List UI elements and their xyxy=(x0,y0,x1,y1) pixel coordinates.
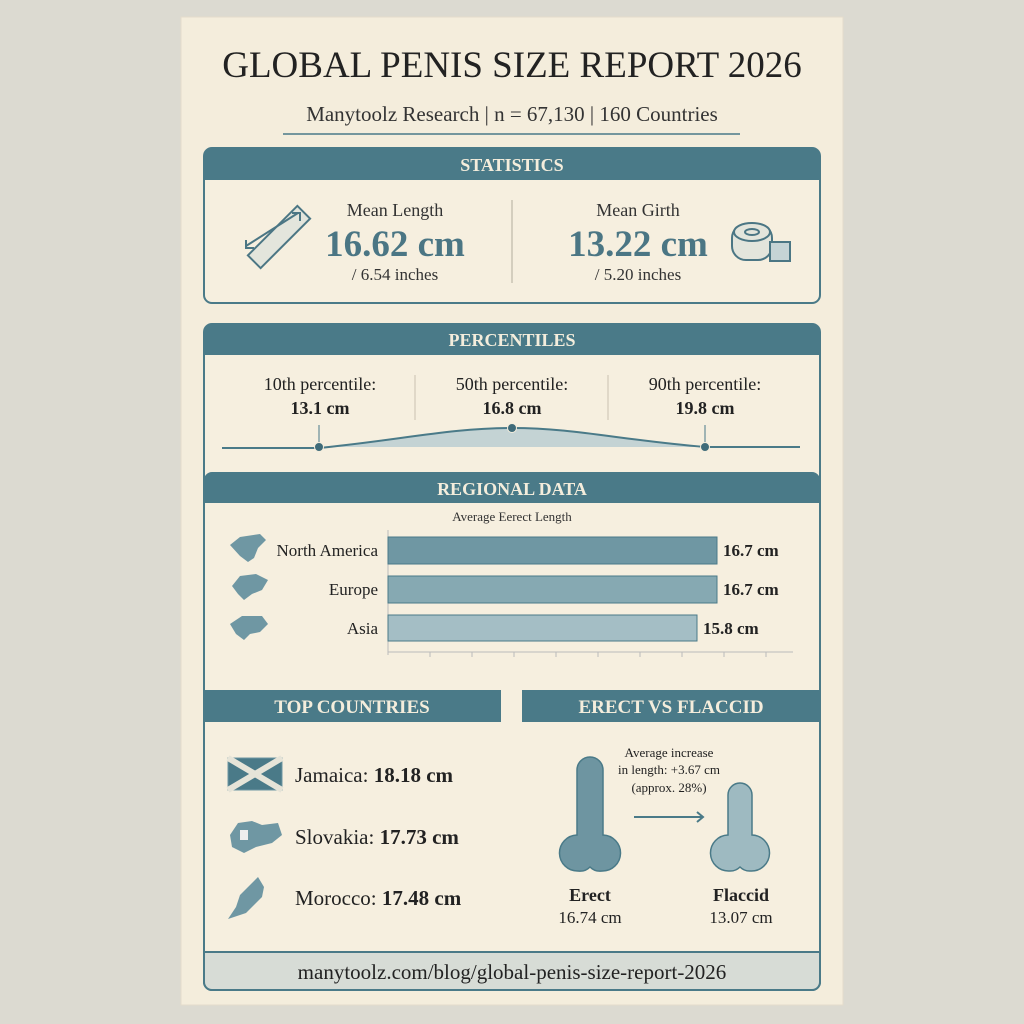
header: top countries xyxy=(204,690,501,722)
icon: tape measure xyxy=(732,223,790,261)
stat: mean girth: Mean Girth xyxy=(596,200,680,220)
labels: erect/flaccid: Flaccid xyxy=(713,885,769,905)
bar chart: regional: Europe xyxy=(329,580,378,599)
chart: distribution curve xyxy=(222,424,800,452)
list: top countries: Slovakia: 17.73 cm xyxy=(295,825,459,849)
list: top countries: Morocco: 17.48 cm xyxy=(295,886,462,910)
percentile labels: 10th percentile: xyxy=(264,374,376,394)
arrow xyxy=(634,812,703,822)
stat: mean length: / 6.54 inches xyxy=(352,265,438,284)
paper xyxy=(181,17,843,1005)
figure: flaccid xyxy=(710,783,770,871)
stat: mean girth xyxy=(568,200,708,284)
bar chart: regional: Average Eerect Length xyxy=(452,509,572,524)
bar chart: regional: North America xyxy=(276,541,378,560)
stat: mean girth: 13.22 cm xyxy=(568,224,708,265)
stat: mean length: 16.62 cm xyxy=(325,224,465,265)
icon: ruler xyxy=(246,206,310,268)
labels: erect/flaccid: 16.74 cm xyxy=(558,908,622,927)
labels: erect/flaccid: 13.07 cm xyxy=(709,908,773,927)
callout: average increase: (approx. 28%) xyxy=(631,780,707,795)
percentile labels: 13.1 cm xyxy=(291,398,349,418)
icons: continents xyxy=(230,534,268,640)
header: top countries: TOP COUNTRIES xyxy=(274,697,430,718)
bar chart: regional: 15.8 cm xyxy=(703,619,759,638)
list: top countries xyxy=(228,758,462,919)
footer xyxy=(204,952,820,990)
list: top countries: Jamaica: 18.18 cm xyxy=(295,763,454,787)
stat: mean girth: / 5.20 inches xyxy=(595,265,681,284)
percentile labels xyxy=(264,374,761,418)
percentile labels: 90th percentile: xyxy=(649,374,761,394)
labels: erect/flaccid: Erect xyxy=(569,885,611,905)
panel: percentiles + regional + lower frame: REGIONAL DATA xyxy=(437,479,587,499)
bar chart: regional xyxy=(230,509,793,657)
stat: mean length: Mean Length xyxy=(347,200,443,220)
bar chart: regional: Asia xyxy=(347,619,378,638)
callout: average increase xyxy=(618,745,720,795)
panel: statistics: STATISTICS xyxy=(460,155,564,175)
panel: percentiles + regional + lower frame xyxy=(204,324,820,990)
bar chart: regional: 16.7 cm xyxy=(723,580,779,599)
percentile labels: 19.8 cm xyxy=(676,398,734,418)
figure: erect xyxy=(559,757,621,871)
title: GLOBAL PENIS SIZE REPORT 2026 xyxy=(222,45,802,86)
callout: average increase: in length: +3.67 cm xyxy=(618,762,720,777)
labels: erect/flaccid xyxy=(558,885,773,927)
panel: statistics xyxy=(204,148,820,303)
percentile labels: 50th percentile: xyxy=(456,374,568,394)
percentile labels: 16.8 cm xyxy=(483,398,541,418)
bar chart: regional: 16.7 cm xyxy=(723,541,779,560)
header: erect vs flaccid: ERECT VS FLACCID xyxy=(578,697,764,718)
header: erect vs flaccid xyxy=(522,690,820,722)
header: regional data xyxy=(204,472,820,503)
panel: percentiles + regional + lower frame: PERCENTILES xyxy=(448,330,576,350)
footer: manytoolz.com/blog/global-penis-size-report-2026 xyxy=(298,960,726,984)
subtitle: Manytoolz Research | n = 67,130 | 160 Countries xyxy=(306,102,718,126)
stat: mean length xyxy=(325,200,465,284)
callout: average increase: Average increase xyxy=(625,745,714,760)
